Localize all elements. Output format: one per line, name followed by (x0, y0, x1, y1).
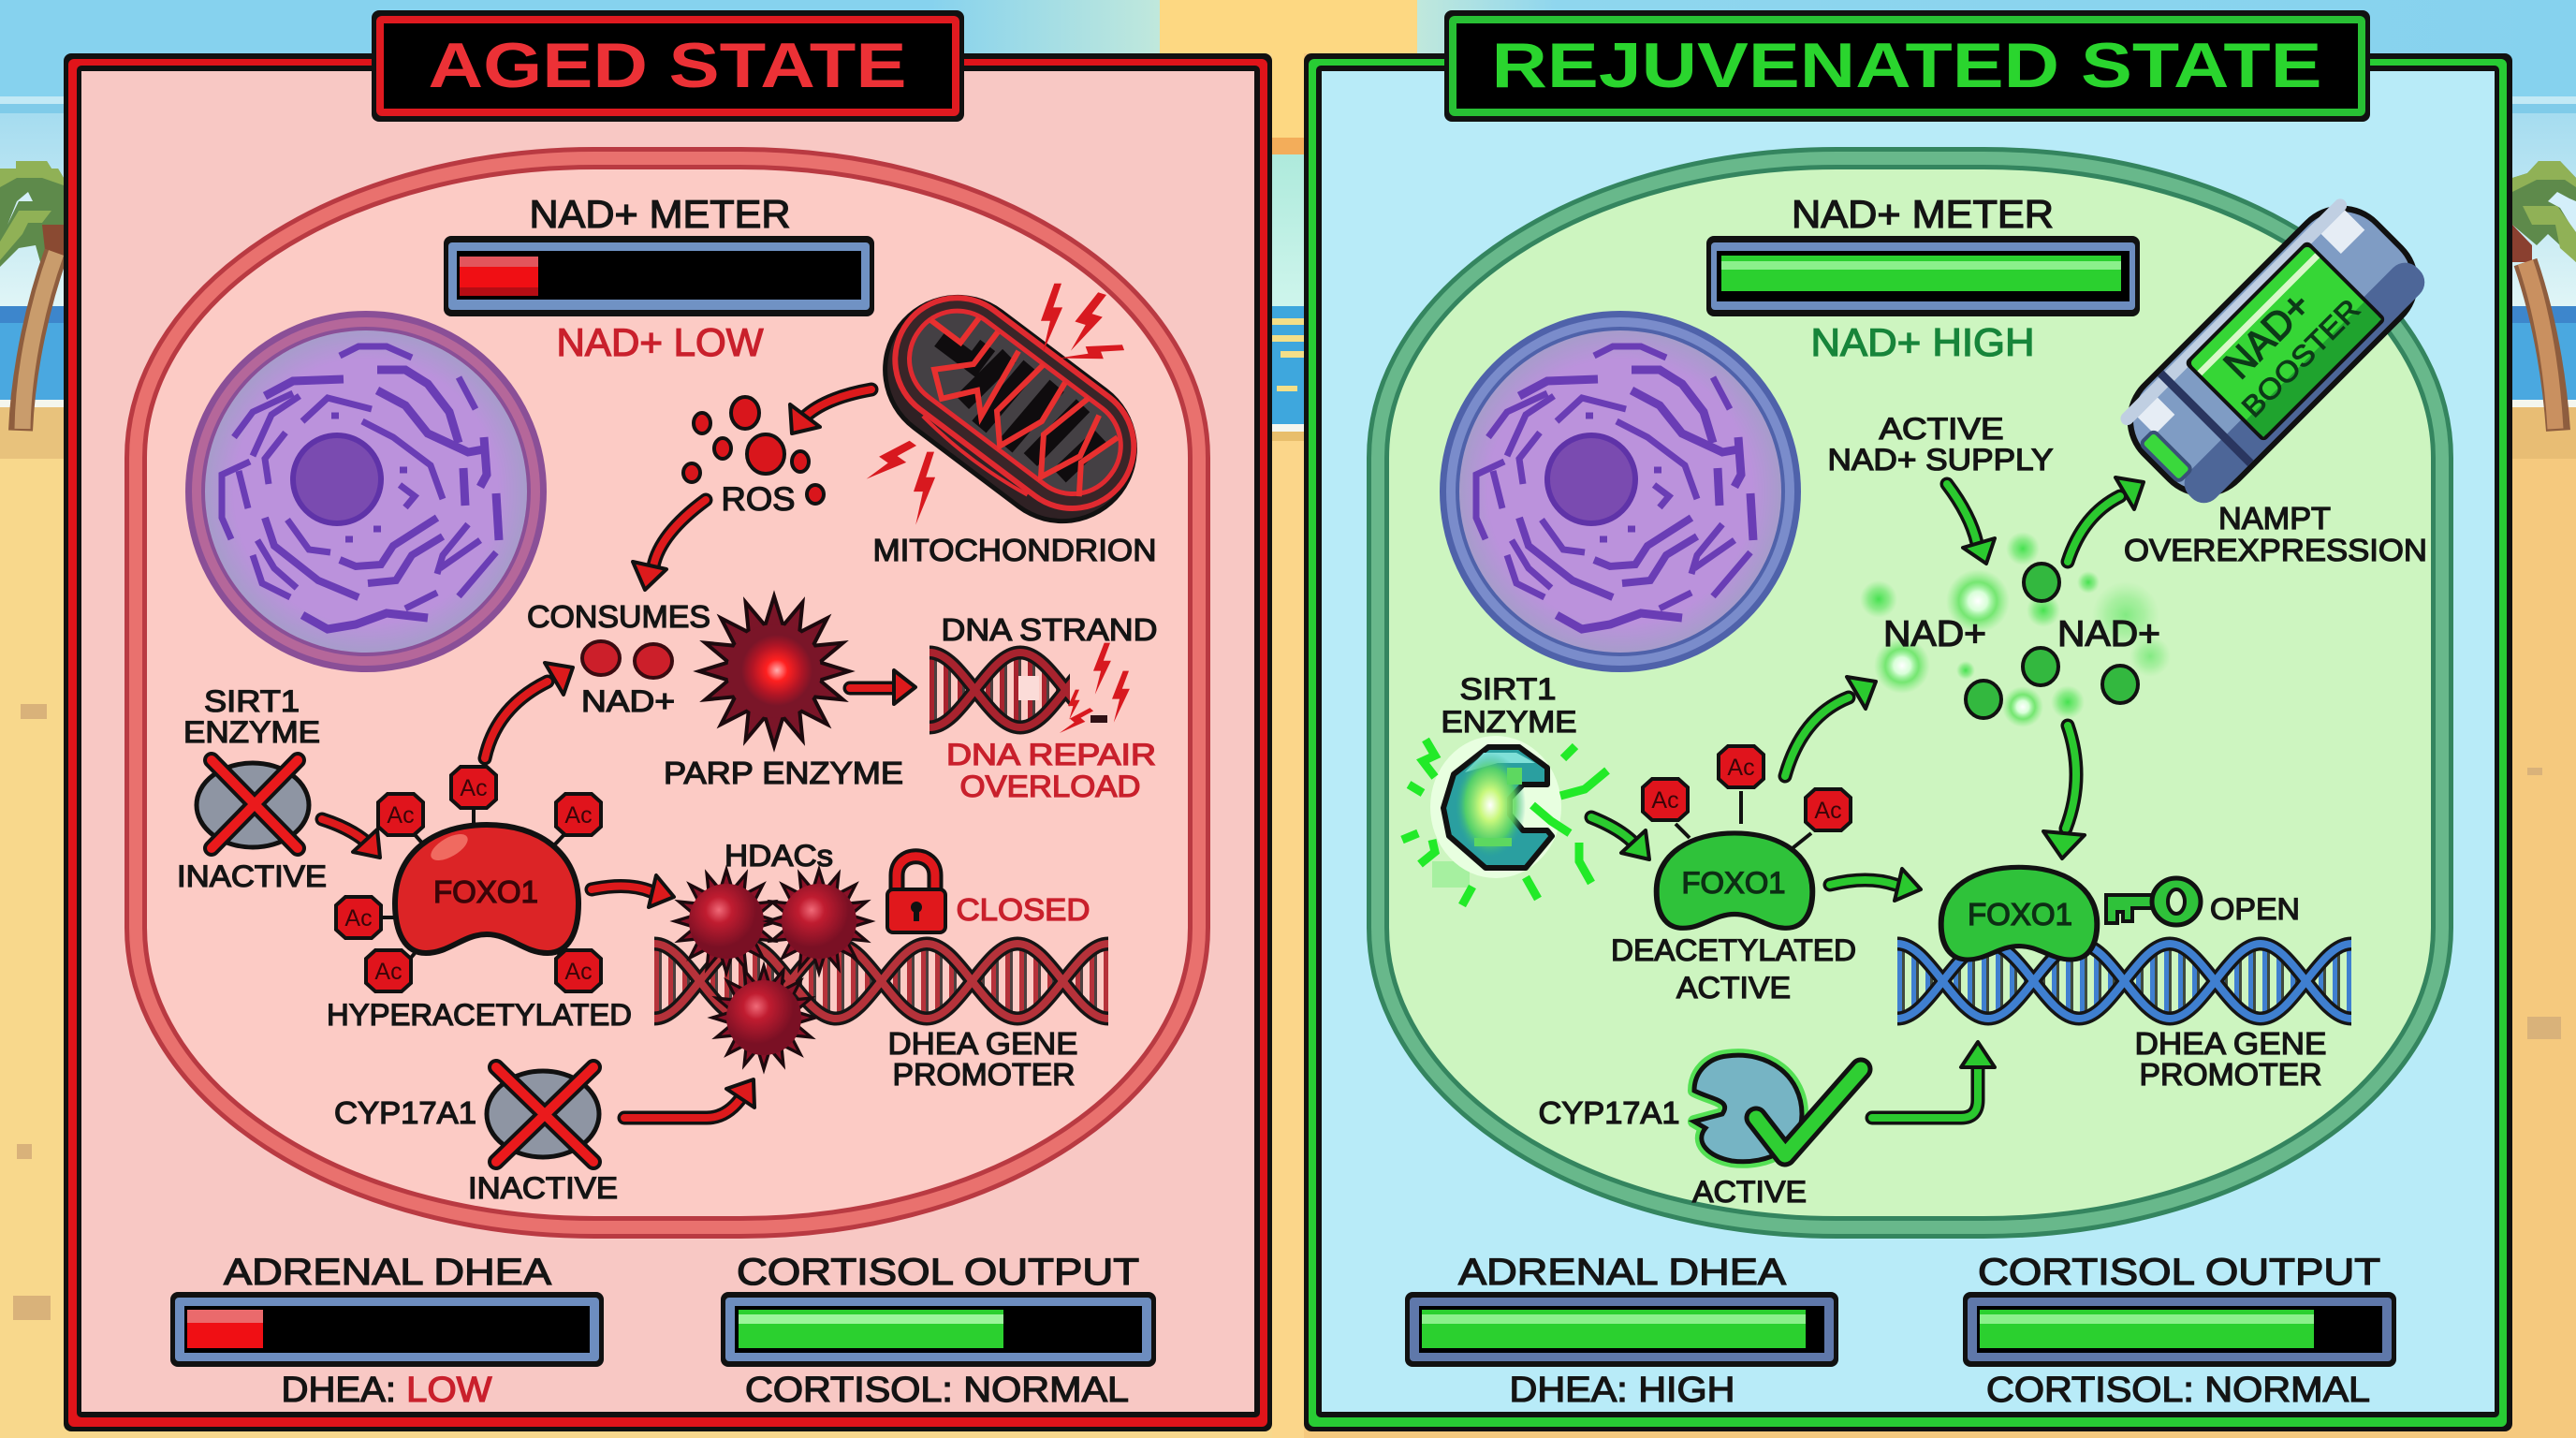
active NAD+ supply label: NAD+ SUPPLY (1827, 443, 2054, 477)
title: aged state: AGED STATE (429, 30, 906, 101)
PARP enzyme (699, 596, 849, 746)
acetyl tags: Ac (387, 802, 415, 829)
nucleus: rejuvenated (1440, 311, 1801, 672)
arrow: FOXO1 to bound FOXO1 (1830, 869, 1921, 901)
arrow: NAD+ pool to booster (2068, 477, 2144, 562)
hyperacetylated label: HYPERACETYLATED (327, 998, 632, 1032)
DNA strand label: DNA STRAND (942, 612, 1157, 647)
cell membrane: aged (136, 158, 1199, 1227)
SIRT1 enzyme label (1442, 672, 1576, 739)
panel: rejuvenated state (1304, 10, 2512, 1431)
DNA repair overload label (946, 738, 1156, 803)
active label: ACTIVE (1692, 1175, 1807, 1209)
PARP enzyme label: PARP ENZYME (664, 756, 903, 790)
NAD+ meter label: NAD+ METER (1792, 192, 2054, 236)
deacetylated active label: ACTIVE (1676, 971, 1791, 1005)
NAMPT overexpression label: OVEREXPRESSION (2124, 533, 2427, 567)
inactive label: INACTIVE (177, 859, 327, 893)
acetyl tags: Ac (564, 802, 593, 829)
SIRT1 enzyme label: SIRT1 (204, 684, 300, 718)
NAD+ booster capsule: BOOSTER (2235, 292, 2366, 423)
adrenal DHEA gauge: high (1405, 1252, 1838, 1410)
FOXO1 deacetylated protein: FOXO1 (1681, 866, 1786, 900)
DNA repair overload label: DNA REPAIR (946, 738, 1156, 771)
NAD+ label: NAD+ (581, 684, 675, 718)
cortisol gauge: normal (1963, 1252, 2396, 1410)
arrow: NAD+ pool to bound FOXO1 (2043, 726, 2085, 858)
NAD+ glowing particles (1860, 532, 2171, 727)
arrow: FOXO1 to HDACs (592, 875, 674, 907)
acetyl tags released: Ac (1651, 787, 1679, 814)
mitochondrion label: MITOCHONDRION (872, 533, 1157, 567)
DNA repair overload label: OVERLOAD (960, 770, 1140, 803)
arrow: mitochondrion to ROS (790, 389, 871, 433)
acetyl tags: Ac (344, 905, 373, 932)
acetyl tags: Ac (460, 775, 488, 801)
cortisol gauge: normal: CORTISOL: NORMAL (745, 1371, 1129, 1410)
CYP17A1 label: CYP17A1 (1539, 1095, 1679, 1130)
consumes label: CONSUMES (527, 599, 710, 634)
NAD+ booster capsule: NAD+ (2215, 283, 2319, 387)
arrow: FOXO1 to NAD+ (485, 663, 573, 758)
NAD+ labels (1883, 614, 2160, 654)
adrenal DHEA gauge: low: DHEA: LOW (281, 1371, 492, 1410)
active NAD+ supply label (1827, 412, 2054, 477)
NAD+ labels: NAD+ (1883, 614, 1986, 654)
FOXO1 deacetylated protein (1657, 833, 1812, 928)
adrenal DHEA gauge: high: ADRENAL DHEA (1458, 1252, 1786, 1293)
adrenal DHEA gauge: low: ADRENAL DHEA (224, 1252, 551, 1293)
active CYP17A1 enzyme (1694, 1055, 1861, 1162)
closed DNA gene promoter helix (654, 944, 1108, 1019)
acetyl tags released: Ac (1727, 755, 1755, 781)
DHEA gene promoter label: PROMOTER (2140, 1057, 2321, 1092)
FOXO1 hyperacetylated protein: FOXO1 (433, 874, 538, 909)
inactive SIRT1 icon (197, 760, 309, 848)
ROS particles (683, 397, 824, 504)
NAMPT overexpression label: NAMPT (2218, 501, 2331, 536)
title: rejuvenated state: REJUVENATED STATE (1492, 30, 2321, 101)
nucleus: aged (185, 311, 547, 672)
panel frame: rejuvenated (1304, 53, 2512, 1431)
SIRT1 enzyme label (183, 684, 320, 749)
cortisol gauge: normal: CORTISOL: NORMAL (1986, 1371, 2370, 1410)
arrow: CYP17A1 to promoter (1872, 1042, 1995, 1118)
SIRT1 enzyme label: SIRT1 (1460, 672, 1556, 706)
panel: aged state (64, 10, 1383, 1431)
palm tree right (2512, 161, 2576, 431)
closed label: CLOSED (957, 892, 1090, 927)
palm tree left (0, 161, 64, 431)
acetyl tags released: Ac (1814, 798, 1842, 824)
cortisol gauge: normal: CORTISOL OUTPUT (737, 1252, 1139, 1293)
arrow: PARP to DNA (850, 670, 915, 704)
HDACs label: HDACs (724, 839, 833, 873)
arrow: SIRT1 to FOXO1 (322, 819, 380, 858)
DHEA gene promoter label: PROMOTER (893, 1057, 1075, 1092)
open label: OPEN (2210, 892, 2300, 926)
acetyl tags: Ac (564, 959, 593, 985)
cell membrane: rejuvenated (1378, 158, 2442, 1227)
arrow: supply to NAD+ pool (1947, 484, 1995, 564)
deacetylated active label (1611, 933, 1856, 1005)
active SIRT1 enzyme (1402, 736, 1607, 905)
DHEA gene promoter label: DHEA GENE (2134, 1026, 2327, 1061)
damaged DNA strand (929, 642, 1130, 734)
inactive label: INACTIVE (468, 1171, 618, 1205)
energy bolts around mitochondrion (864, 284, 1124, 525)
NAD+ labels: NAD+ (2057, 614, 2160, 654)
NAD+ high label: NAD+ HIGH (1810, 320, 2035, 364)
panel frame: aged (64, 53, 1272, 1431)
NAD+ meter bar: low (444, 236, 874, 316)
inactive CYP17A1 icon (487, 1067, 599, 1162)
lock icon (887, 857, 945, 932)
cortisol gauge: normal: CORTISOL OUTPUT (1978, 1252, 2380, 1293)
cortisol gauge: normal (721, 1252, 1156, 1410)
DHEA gene promoter label: DHEA GENE (887, 1026, 1078, 1061)
NAD+ meter label: NAD+ METER (530, 192, 790, 236)
adrenal DHEA gauge: low (170, 1252, 604, 1410)
title: aged state (372, 10, 964, 122)
arrow: SIRT1 to FOXO1 (1591, 817, 1649, 859)
FOXO1 bound to promoter (1941, 867, 2097, 960)
acetyl tags (336, 767, 601, 991)
NAMPT overexpression label (2124, 501, 2427, 567)
arrow: CYP17A1 to promoter (624, 1079, 754, 1118)
NAD+ low label: NAD+ LOW (556, 320, 764, 364)
FOXO1 hyperacetylated protein (379, 805, 578, 964)
key icon (2106, 878, 2201, 925)
arrow: FOXO1 to NAD+ pool (1785, 677, 1876, 776)
active NAD+ supply label: ACTIVE (1880, 412, 2003, 446)
CYP17A1 label: CYP17A1 (334, 1095, 476, 1130)
ROS label: ROS (721, 481, 796, 518)
FOXO1 bound to promoter: FOXO1 (1968, 897, 2072, 932)
adrenal DHEA gauge: high: DHEA: HIGH (1509, 1371, 1735, 1410)
open DNA gene promoter helix (1897, 944, 2351, 1019)
mitochondrion (853, 265, 1167, 553)
HDAC enzymes (675, 870, 871, 1069)
title: rejuvenated state (1444, 10, 2370, 122)
sand rocks (13, 704, 2561, 1320)
NAD+ molecules consumed (582, 641, 672, 678)
acetyl tags: Ac (374, 959, 402, 985)
acetyl tags released (1643, 746, 1851, 852)
NAD+ meter bar: high (1706, 236, 2140, 316)
deacetylated active label: DEACETYLATED (1611, 933, 1856, 967)
NAD+ booster capsule (2106, 184, 2439, 518)
arrow: ROS to consumes (633, 500, 706, 590)
DHEA gene promoter label (2134, 1026, 2327, 1092)
SIRT1 enzyme label: ENZYME (183, 715, 320, 749)
DHEA gene promoter label (887, 1026, 1078, 1092)
SIRT1 enzyme label: ENZYME (1442, 705, 1576, 739)
